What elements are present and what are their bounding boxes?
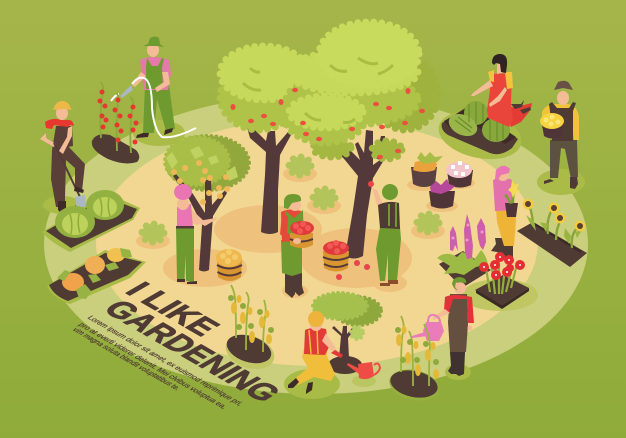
tomato bed [92, 82, 139, 163]
sunflower bed [517, 199, 587, 267]
man reaching for apple [368, 181, 401, 286]
red flower bed [462, 252, 538, 311]
woman picking oranges [174, 184, 217, 284]
man with basket of yellow flowers [537, 81, 585, 195]
body text [70, 314, 245, 410]
gardener with spade [40, 101, 86, 214]
bush group [136, 157, 445, 249]
body line 2: pro at everti viderer delenit. Mei civibus voluptua ea, [76, 321, 230, 410]
squash plants left [221, 285, 279, 375]
woman in red kneeling [471, 54, 532, 127]
title: I LIKE GARDENING [96, 277, 289, 407]
gardener with watering hose [111, 36, 196, 146]
orange tree [165, 136, 249, 272]
pink watering can [412, 315, 444, 341]
pink hat woman with potted plant [491, 166, 521, 258]
man carrying apple basket [280, 194, 314, 298]
basket of oranges [216, 249, 242, 281]
apple tree left [220, 46, 308, 234]
basket of apples [323, 240, 349, 272]
small tree [313, 293, 381, 374]
watermelon bed [434, 101, 526, 166]
fallen apples [336, 260, 370, 280]
garden ground: outer band [44, 94, 588, 394]
cabbage bed [42, 190, 140, 252]
foxglove bed [437, 214, 491, 288]
man with pink watering can [432, 277, 474, 380]
title line: I LIKE: I LIKE [118, 277, 228, 341]
orchard ground shadows [163, 205, 412, 298]
body line 1: Lorem ipsum dolor sit amet, ex euismod reprimique pri, [85, 314, 245, 407]
kneeling gardener with tree [284, 293, 381, 399]
pumpkin bed [47, 248, 146, 304]
title line: GARDENING: GARDENING [96, 295, 289, 407]
garden ground: inner sand [96, 118, 538, 366]
vegetable baskets [407, 152, 475, 212]
red watering can [347, 362, 380, 387]
apple tree large [278, 22, 438, 258]
body line 3: vim magna soluta blandit voluptatibus te. [70, 326, 183, 392]
squash plants right [386, 316, 442, 405]
